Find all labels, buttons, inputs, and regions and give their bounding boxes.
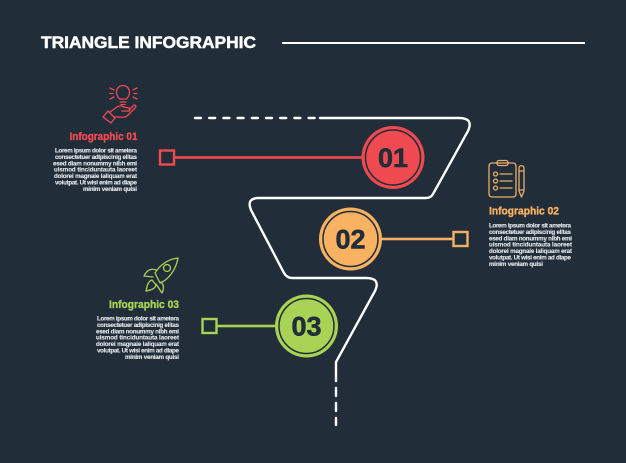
- body 02: dolorei magnaie laliquam erat: [489, 248, 572, 255]
- body 01: [53, 148, 138, 193]
- body 02: uismod tinciduntauta laoreet: [489, 242, 572, 249]
- body 02: minim veniam quisi: [489, 261, 543, 268]
- body 03: minim veniam quisi: [125, 354, 179, 361]
- body 01: minim veniam quisi: [83, 186, 137, 193]
- panel: infographic 01 text: [53, 131, 138, 193]
- body 03: [96, 316, 180, 361]
- body 01: Lorem ipsum dolor sit ametera: [55, 148, 138, 154]
- title rule: [282, 42, 585, 44]
- step 03 marker: [202, 294, 338, 358]
- heading 01: Infographic 01: [70, 131, 138, 143]
- body 01: uismod tinciduntauta laoreet: [54, 167, 137, 174]
- icon: clipboard and pencil: [489, 160, 524, 197]
- title: TRIANGLE INFOGRAPHIC: [41, 34, 256, 52]
- body 01: consectetuer adipiscinig elitas: [55, 154, 138, 161]
- winding path: [195, 118, 470, 425]
- body 02: [489, 222, 572, 268]
- step 02 marker: 02: [335, 224, 366, 254]
- body 03: esed diam nonummy nibh emi: [96, 328, 179, 335]
- body 01: esed diam nonummy nibh emi: [53, 160, 137, 167]
- step 01 marker: [160, 126, 424, 189]
- body 01: volutpat. Ut wisi enim ad diape: [55, 180, 138, 186]
- body 03: dolorei magnaie laliquam erat: [96, 341, 179, 348]
- step 02 marker: [319, 208, 468, 270]
- body 02: consectetuer adipiscinig elitas: [489, 229, 572, 236]
- heading 03: Infographic 03: [109, 299, 179, 311]
- icon: lightbulb in hand: [103, 86, 137, 123]
- body 03: consectetuer adipiscinig elitas: [97, 322, 180, 329]
- body 03: uismod tinciduntauta laoreet: [96, 335, 179, 342]
- step 03 marker: 03: [291, 312, 322, 342]
- icon: rocket: [144, 258, 178, 293]
- body 02: Lorem ipsum dolor sit ametera: [489, 222, 572, 230]
- heading 02: Infographic 02: [489, 206, 559, 218]
- body 02: volutpat. Ut wisi enim ad diape: [489, 254, 572, 262]
- panel: infographic 02 text: [489, 206, 572, 268]
- body 01: dolorei magnaie laliquam erat: [54, 173, 137, 180]
- body 03: volutpat. Ut wisi enim ad diape: [97, 348, 180, 354]
- body 03: Lorem ipsum dolor sit ametera: [97, 316, 180, 322]
- panel: infographic 03 text: [96, 299, 180, 361]
- body 02: esed diam nonummy nibh emi: [489, 235, 572, 242]
- step 01 marker: 01: [378, 143, 408, 173]
